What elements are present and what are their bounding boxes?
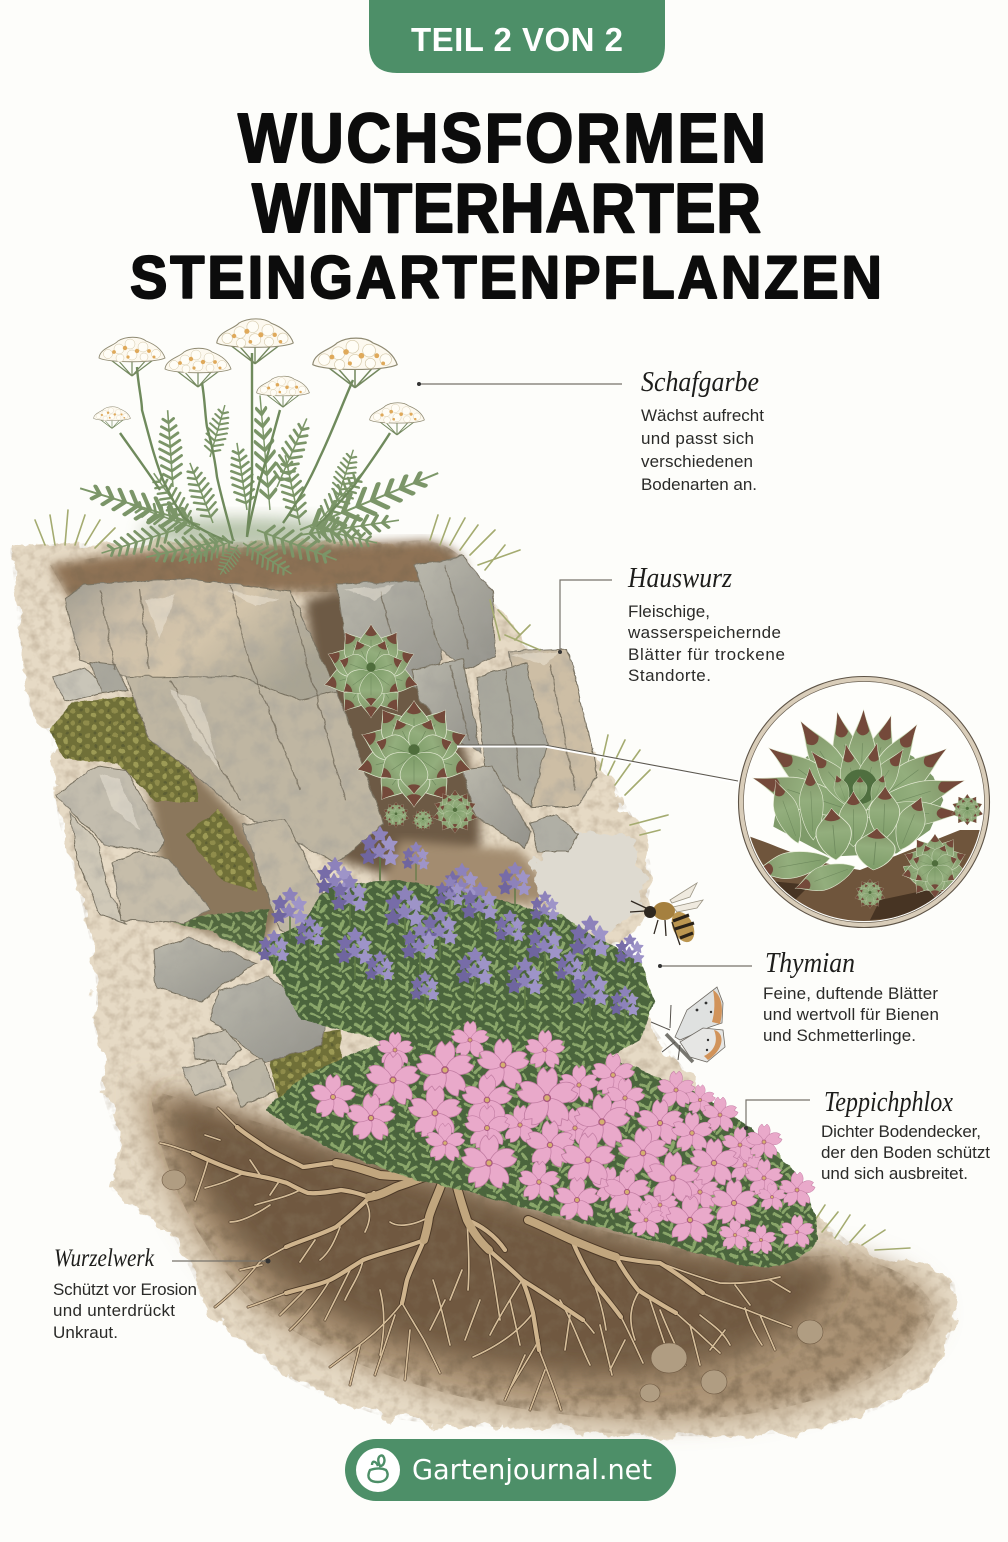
soil: dark root layer xyxy=(140,1085,935,1420)
callout: Hauswurz: Blätter für trockene xyxy=(628,645,785,664)
title: WUCHSFORMEN xyxy=(238,99,766,177)
soil: top band xyxy=(50,540,466,600)
plant: Teppichphlox xyxy=(265,1021,818,1268)
footer badge: Gartenjournal.net xyxy=(412,1453,652,1486)
callout: Teppichphlox: Teppichphlox xyxy=(824,1086,953,1118)
title: STEINGARTENPFLANZEN xyxy=(130,245,882,311)
callout: Teppichphlox xyxy=(744,1086,990,1183)
grass tufts xyxy=(35,510,910,1250)
title xyxy=(130,99,882,311)
callout: Wurzelwerk: Schützt vor Erosion xyxy=(53,1280,197,1299)
moss patches xyxy=(50,695,345,1110)
icon: bee xyxy=(630,883,703,946)
callout: Wurzelwerk xyxy=(53,1245,270,1342)
callout: Schafgarbe: verschiedenen xyxy=(641,452,753,471)
callout: Teppichphlox: Dichter Bodendecker, xyxy=(821,1122,981,1141)
callout: Hauswurz: wasserspeichernde xyxy=(627,623,781,642)
callout: Schafgarbe: Wächst aufrecht xyxy=(641,406,764,425)
magnified Hauswurz lens xyxy=(738,676,990,930)
callout: Teppichphlox: der den Boden schützt xyxy=(821,1143,990,1162)
header badge: TEIL 2 VON 2 xyxy=(411,21,623,58)
icon: butterfly xyxy=(651,987,725,1062)
callout: Thymian: Thymian xyxy=(765,947,855,979)
callout: Hauswurz: Standorte. xyxy=(628,666,711,685)
callout: Wurzelwerk: Unkraut. xyxy=(53,1323,118,1342)
roots xyxy=(160,1108,791,1410)
icon: logo xyxy=(356,1448,400,1492)
arrow: rosette to lens xyxy=(457,745,738,782)
callout: Thymian: und Schmetterlinge. xyxy=(763,1026,916,1045)
callout: Thymian xyxy=(658,947,939,1045)
callout: Schafgarbe: Schafgarbe xyxy=(641,366,759,398)
callout: Schafgarbe xyxy=(417,366,764,494)
callout: Wurzelwerk: Wurzelwerk xyxy=(54,1245,155,1272)
footer badge xyxy=(345,1439,676,1501)
callout: Hauswurz: Fleischige, xyxy=(628,602,710,621)
title: WINTERHARTER xyxy=(252,169,761,247)
plant: Hauswurz rosettes xyxy=(321,624,479,834)
rocks xyxy=(52,556,598,1108)
plant: Schafgarbe xyxy=(76,319,443,582)
callout: Wurzelwerk: und unterdrückt xyxy=(53,1301,175,1320)
callout: Teppichphlox: und sich ausbreitet. xyxy=(821,1164,968,1183)
callout: Hauswurz: Hauswurz xyxy=(627,562,732,594)
callout: Hauswurz xyxy=(558,562,785,685)
header badge xyxy=(369,0,665,73)
callout: Thymian: und wertvoll für Bienen xyxy=(763,1005,939,1024)
soil: gaps behind rocks xyxy=(305,590,480,880)
soil: hillside xyxy=(10,540,955,1436)
stones in soil xyxy=(162,1170,823,1402)
illustration: rock garden xyxy=(10,319,955,1436)
stones: right grey scree xyxy=(530,833,645,930)
callout: Schafgarbe: und passt sich xyxy=(641,429,754,448)
callout: Thymian: Feine, duftende Blätter xyxy=(763,984,938,1003)
plant: Thymian xyxy=(259,827,655,1062)
callout: Schafgarbe: Bodenarten an. xyxy=(641,475,757,494)
